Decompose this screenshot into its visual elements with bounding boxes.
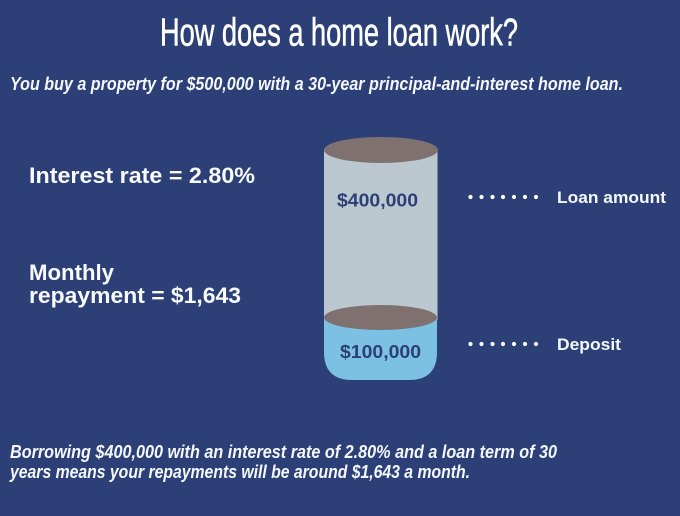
label: deposit: Deposit	[557, 335, 621, 354]
explanatory note: Borrowing $400,000 with an interest rate of 2.80% and a loan term of 30	[10, 442, 557, 462]
cylinder divider ellipse	[324, 305, 437, 330]
dotted leader: deposit	[468, 342, 538, 346]
subtitle: You buy a property for $500,000 with a 30-year principal-and-interest home loan.	[10, 74, 623, 94]
cylinder top ellipse	[324, 137, 438, 163]
value: loan amount: $400,000	[337, 190, 418, 210]
cylinder segment: deposit	[324, 318, 437, 380]
dotted leader: loan amount	[468, 195, 538, 199]
stat: interest rate: Interest rate = 2.80%	[29, 163, 255, 188]
stat: monthly repayment	[29, 260, 241, 308]
value: deposit: $100,000	[340, 342, 421, 362]
explanatory note: years means your repayments will be around $1,643 a month.	[9, 462, 470, 482]
stat: monthly repayment: repayment = $1,643	[29, 283, 241, 308]
cylinder segment: loan amount	[324, 150, 438, 320]
title: How does a home loan work?	[160, 12, 518, 54]
stat: monthly repayment: Monthly	[29, 260, 115, 285]
cylinder chart	[324, 137, 438, 380]
label: loan amount: Loan amount	[557, 188, 666, 207]
explanatory note	[9, 442, 557, 482]
